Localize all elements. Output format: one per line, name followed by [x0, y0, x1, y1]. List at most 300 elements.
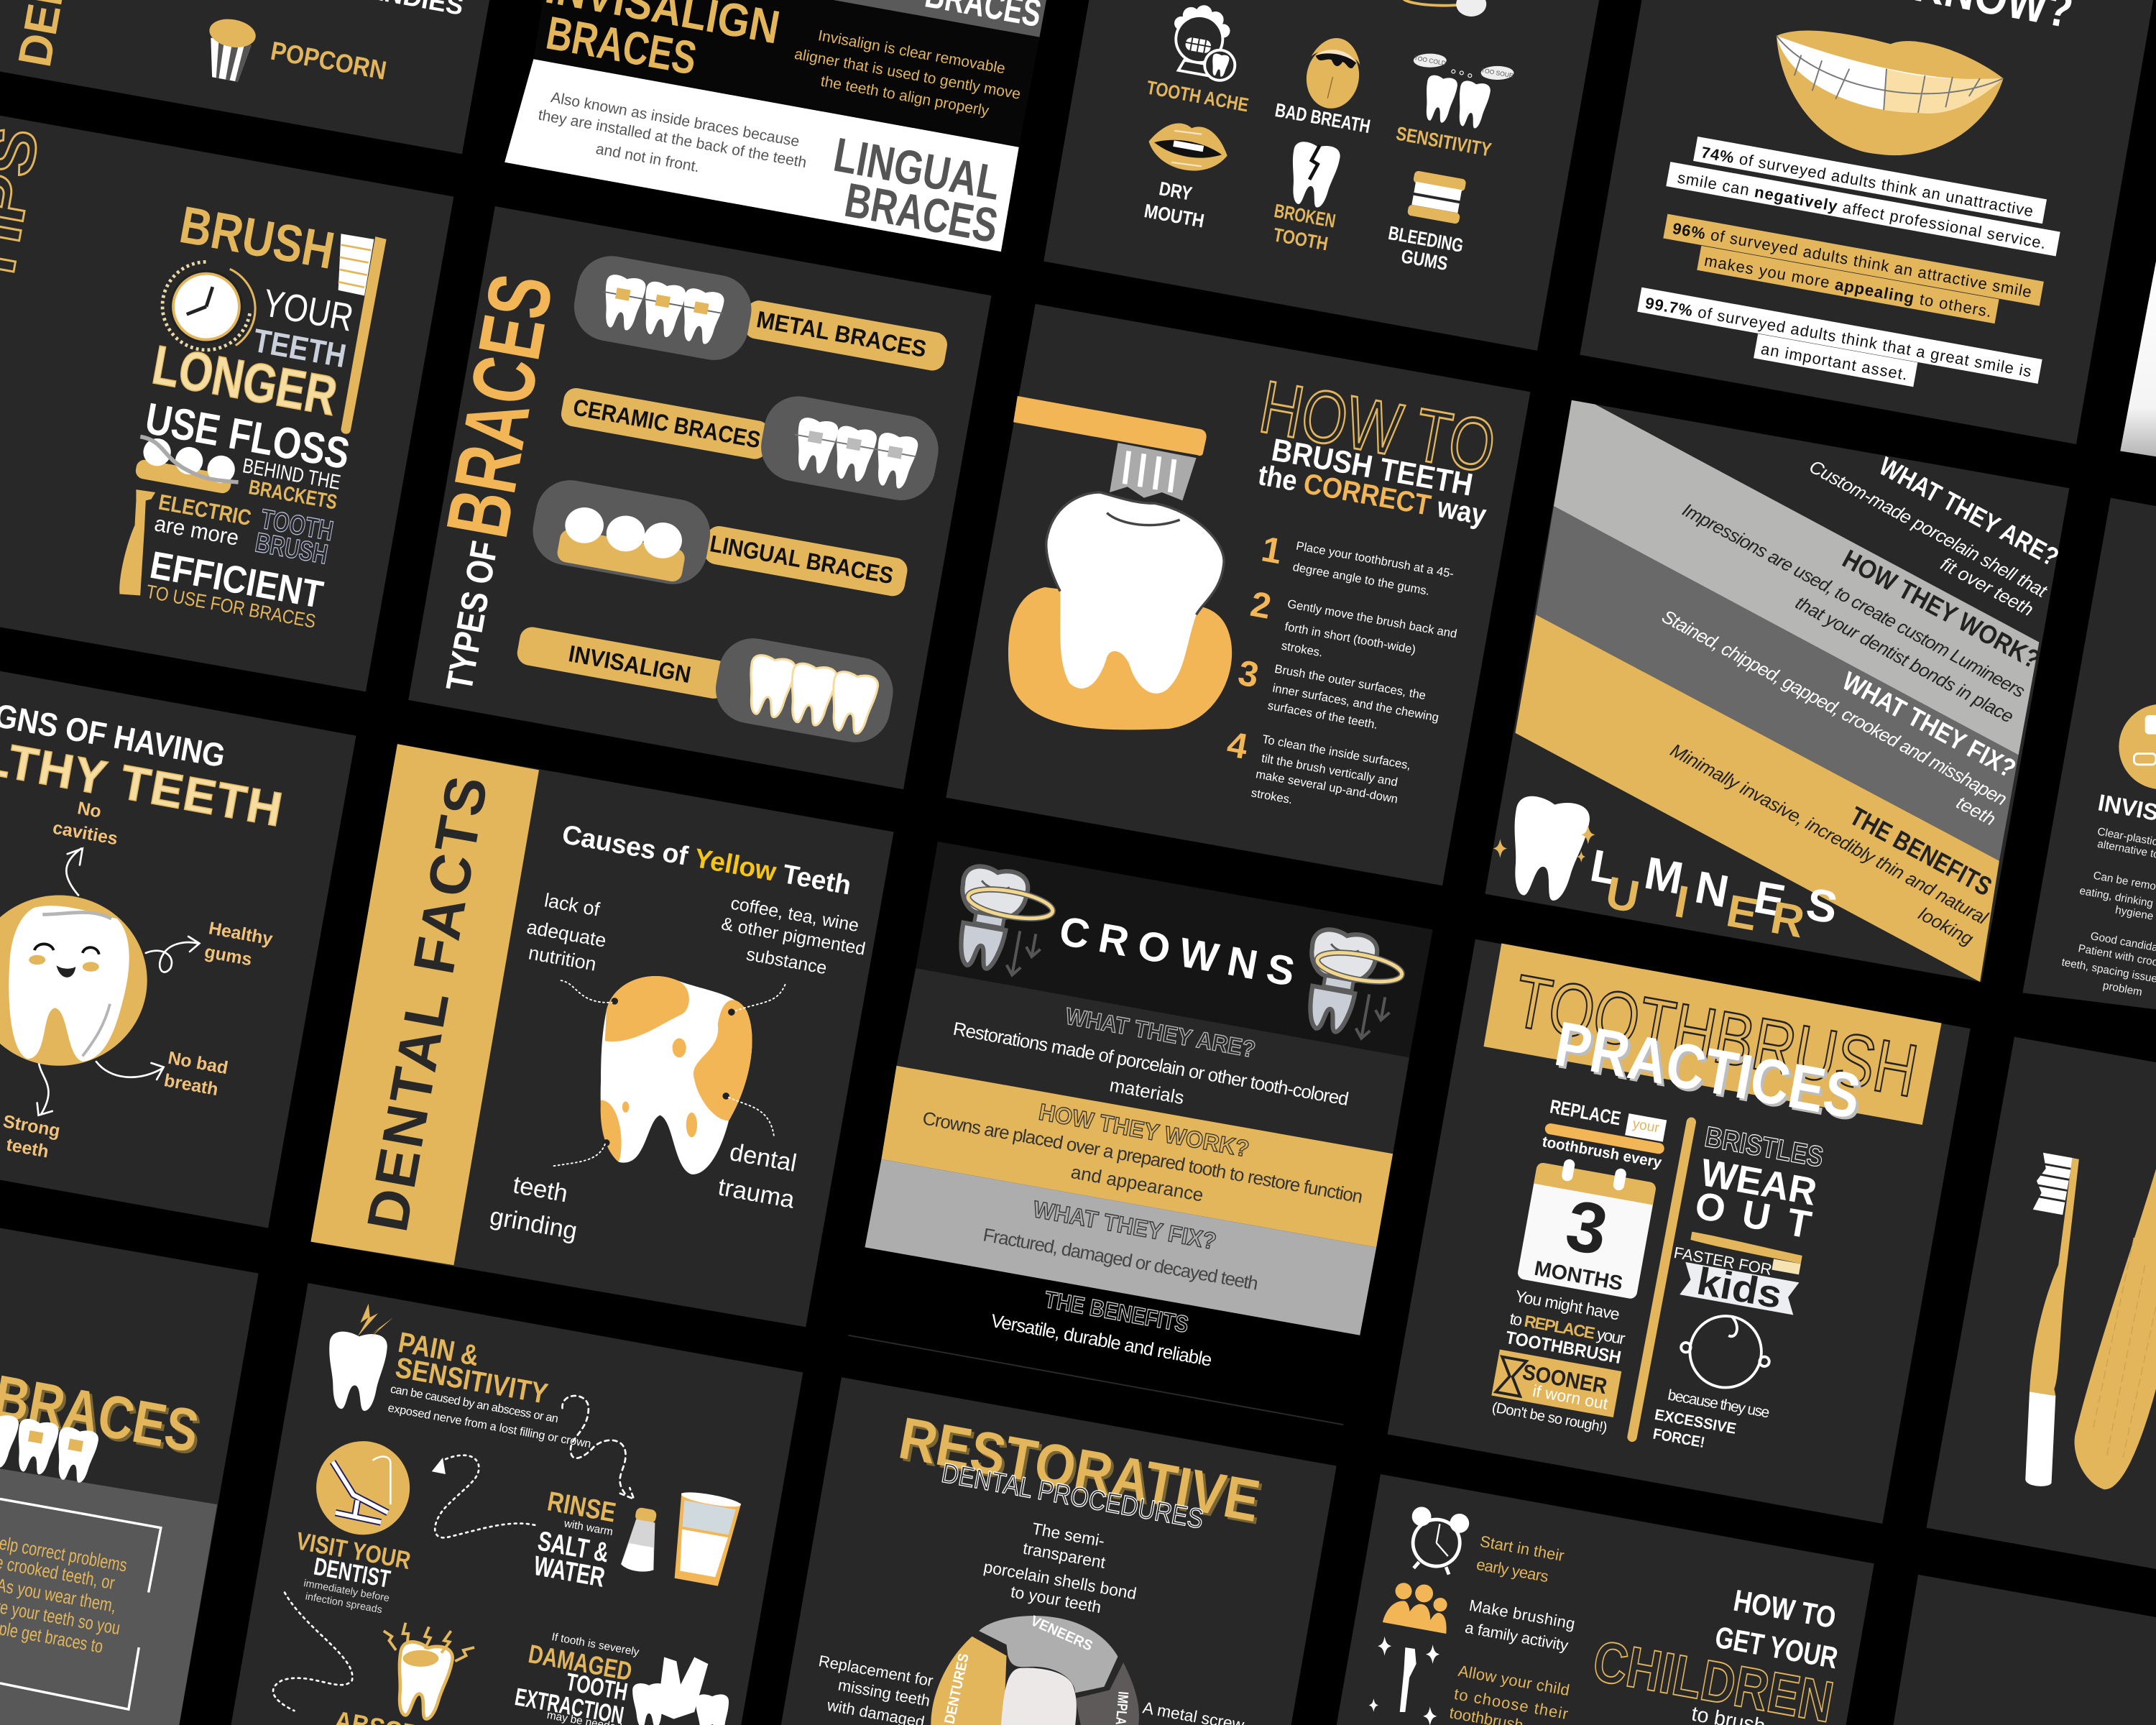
label: broken tooth: TOOTH — [1272, 224, 1330, 254]
step 1 — [1258, 528, 1455, 598]
band: header — [916, 842, 1433, 1057]
band: gray — [865, 1159, 1376, 1335]
section: how they work: and appearance — [1069, 1162, 1205, 1206]
panel: invisalign and lingual braces — [505, 0, 1046, 253]
heading: lumineers: R — [1767, 892, 1808, 947]
icon: clock — [155, 256, 262, 358]
row: lingual braces — [528, 474, 909, 598]
text: what they fix: WHAT THEY FIX? — [1838, 666, 2021, 783]
band: dark gray — [1536, 506, 2019, 861]
icon: large handle — [2075, 1169, 2156, 1489]
heading: causes of yellow teeth: Causes of Yellow Teeth — [560, 819, 854, 901]
icon: right crown — [1298, 926, 1407, 1044]
heading: dental procedures: DENTAL PROCEDURES — [939, 1458, 1206, 1535]
heading: pain and sensitivity — [393, 1326, 550, 1410]
label: strong teeth: Strong — [1, 1111, 62, 1141]
stat: 96 percent: 96% of surveyed adults think an attractive smile — [1671, 218, 2033, 301]
text: replacement note: You might have — [1514, 1287, 1621, 1324]
text: rinse: with warm — [563, 1517, 614, 1538]
label: dental trauma — [716, 1138, 798, 1214]
icon: forceps — [632, 1657, 729, 1725]
text: start early: Start in their — [1478, 1532, 1566, 1565]
text: what they are: WHAT THEY ARE? — [1874, 451, 2063, 572]
stat: 96 percent: makes you more appealing to others. — [1703, 252, 1993, 321]
text: lingual description: Also known as inside braces because — [550, 89, 801, 150]
text: veneers description: transparent — [1021, 1539, 1107, 1572]
label: strong teeth: teeth — [5, 1135, 50, 1162]
gray band — [833, 0, 1046, 37]
callout: sooner — [1491, 1349, 1621, 1417]
label: lack of nutrition — [525, 889, 608, 975]
step 3: 3 — [1235, 652, 1262, 696]
step 4 — [1224, 724, 1412, 806]
icon: toothbrush and sparkles — [1369, 1637, 1439, 1725]
gray band — [0, 1468, 217, 1725]
icon: electric toothbrush — [119, 489, 155, 595]
text: invisalign description: aligner that is used to gently move — [793, 46, 1022, 103]
text: because they use — [1651, 1386, 1771, 1451]
panel: crowns — [848, 842, 1433, 1425]
icon: flossed teeth — [133, 436, 244, 496]
panel: restorative — [781, 1377, 1337, 1725]
band: gold — [1515, 615, 1999, 982]
frame — [0, 1499, 161, 1709]
icon: brush with your — [1544, 1113, 1667, 1155]
stat: 99.7 percent: 99.7% of surveyed adults think that a great smile is — [1644, 293, 2033, 380]
step 4: make several up-and-down — [1255, 767, 1399, 806]
panel: dental facts — [310, 744, 894, 1327]
label: teeth grinding: grinding — [488, 1202, 579, 1245]
heading: pain and sensitivity: PAIN & — [396, 1326, 482, 1372]
step 3: inner surfaces, and the chewing — [1271, 681, 1440, 724]
row: ceramic braces — [559, 386, 944, 506]
text: are more: are more — [152, 511, 241, 551]
heading: crowns: CROWNS — [1056, 908, 1298, 995]
text: veneers description: The semi- — [1031, 1519, 1106, 1550]
text: what they are: fit over teeth — [1938, 554, 2037, 620]
heading: lumineers: L — [1587, 840, 1623, 895]
section: what they are: Restorations made of porcelain or other tooth-colored — [952, 1019, 1350, 1110]
step 1: 1 — [1258, 528, 1285, 571]
divider — [1632, 1122, 1691, 1437]
section: what they fix: WHAT THEY FIX? — [1031, 1196, 1218, 1254]
text: faster for: FASTER FOR — [1672, 1243, 1774, 1279]
stat: 74 percent: 74% of surveyed adults think an unattractive — [1700, 143, 2035, 220]
text: braces description — [0, 1532, 129, 1657]
arrow: dotted to dentist — [435, 1455, 535, 1537]
heading: lumineers: I — [1671, 876, 1692, 928]
text: rinse: WATER — [531, 1550, 607, 1593]
panel: symptoms — [1044, 0, 1599, 351]
row: invisalign: INVISALIGN — [566, 640, 693, 688]
icon: brush with your: your — [1631, 1116, 1661, 1136]
chart: procedure wheel: DENTURES — [942, 1652, 972, 1725]
panel: bottom right blank — [1894, 1575, 2156, 1725]
text: immediately: immediately before — [303, 1578, 390, 1604]
text: invisalign description: Invisalign is clear removable — [816, 27, 1007, 77]
panel: did you know — [1580, 0, 2153, 444]
icon: tongue — [1302, 34, 1365, 113]
text: rinse — [531, 1486, 618, 1593]
stat: 74 percent — [1666, 137, 2060, 257]
label: popcorn: POPCORN — [269, 36, 389, 86]
step 4: 4 — [1224, 724, 1251, 767]
heading: lumineers: M — [1641, 848, 1687, 904]
label: healthy gums — [203, 918, 275, 970]
text: 3: 3 — [1560, 1185, 1613, 1271]
icon: popcorn — [201, 16, 258, 83]
text: what they fix: teeth — [1953, 793, 1999, 830]
label: dry mouth: DRY — [1158, 178, 1194, 205]
text: the benefits: looking — [1915, 904, 1976, 950]
section: how they work: Crowns are placed over a prepared tooth to restore function — [921, 1108, 1364, 1208]
step 2: strokes. — [1281, 639, 1324, 660]
divider line — [848, 1335, 1343, 1425]
band: dark — [896, 968, 1409, 1154]
step 1: degree angle to the gums. — [1291, 560, 1431, 598]
step 2: 2 — [1248, 584, 1274, 627]
label: coffee tea wine: coffee, tea, wine — [729, 893, 860, 936]
icon: gold tooth circle — [2119, 704, 2156, 789]
text: to use for braces: TO USE FOR BRACES — [144, 581, 318, 632]
text: because they use: EXCESSIVE — [1654, 1407, 1738, 1438]
text: description: hygiene — [2114, 904, 2155, 923]
label: lack of nutrition: adequate — [525, 916, 608, 952]
text: electric: ELECTRIC — [157, 490, 253, 530]
text: the benefits: Minimally invasive, incredibly thin and natural — [1667, 740, 1991, 929]
illustration: tooth — [1046, 492, 1224, 694]
label: no bad breath: No bad — [167, 1048, 229, 1078]
label: bleeding gums: GUMS — [1399, 245, 1450, 275]
text: efficient: EFFICIENT — [147, 544, 326, 617]
icon: alarm clock — [1403, 1505, 1470, 1576]
text: damaged tooth extraction — [512, 1631, 640, 1725]
text: start early: early years — [1475, 1555, 1550, 1586]
icon: toothbrush tip — [2025, 1392, 2055, 1486]
step 4: To clean the inside surfaces, — [1261, 732, 1412, 772]
white band — [505, 59, 1019, 252]
text: dentures description: Replacement for — [817, 1652, 934, 1690]
banner: kids — [1680, 1260, 1799, 1317]
text: damaged tooth extraction: DAMAGED — [526, 1639, 635, 1686]
panel: braces bottom left — [0, 1228, 259, 1725]
text: brush outline: BRUSH — [253, 527, 330, 571]
heading: how to: HOW TO — [1254, 364, 1501, 488]
text: rinse: SALT & — [535, 1525, 612, 1568]
label: bleeding gums — [1387, 222, 1465, 275]
text: behind the: BEHIND THE — [241, 454, 342, 494]
icon: crowned tooth partial — [1403, 0, 1486, 17]
text: family activity: a family activity — [1464, 1619, 1570, 1655]
label: coffee tea wine: & other pigmented — [720, 914, 867, 960]
heading: lumineers — [1587, 840, 1841, 947]
section: the benefits: Versatile, durable and reliable — [990, 1311, 1213, 1371]
heading: lingual braces — [830, 128, 1005, 253]
text: wear: WEAR — [1697, 1151, 1820, 1214]
heading: toothbrush: TOOTHBRUSH — [1508, 958, 1924, 1113]
section: the benefits: THE BENEFITS — [1043, 1287, 1191, 1338]
icon: left crown — [949, 863, 1058, 980]
text: dentures description: missing teeth — [837, 1675, 931, 1710]
heading: how to: HOW TO — [1731, 1583, 1838, 1634]
banner: kids: kids — [1694, 1260, 1785, 1317]
icon: glass of water — [666, 1489, 742, 1588]
arrow: dotted to abscess — [273, 1593, 352, 1711]
text: months: MONTHS — [1532, 1257, 1624, 1295]
text: don't be so rough: (Don't be so rough!) — [1491, 1399, 1608, 1436]
panel: toothbrush practices — [1387, 939, 1971, 1524]
heading: restorative: RESTORATIVE — [897, 1408, 1267, 1537]
section: what they are: WHAT THEY ARE? — [1064, 1003, 1258, 1062]
chart: procedure wheel: VENEERS — [1028, 1613, 1095, 1655]
text: description: problem — [2102, 980, 2143, 998]
label: tooth ache: TOOTH ACHE — [1145, 76, 1250, 116]
label: no bad breath — [162, 1048, 229, 1100]
label: healthy gums: Healthy — [207, 918, 275, 949]
callout: sooner: if worn out — [1531, 1381, 1610, 1413]
heading: visit your: VISIT YOUR — [294, 1527, 413, 1575]
text: replacement note: TOOTHBRUSH — [1504, 1328, 1623, 1368]
icon: small toothbrush — [1688, 1232, 1803, 1274]
text: how they work: that your dentist bonds in place — [1792, 593, 2017, 727]
arrow head — [432, 1458, 446, 1474]
icon: bleeding gums — [1407, 170, 1467, 224]
section: what they fix: Fractured, damaged or decayed teeth — [982, 1225, 1260, 1294]
text: dentures description — [817, 1652, 934, 1725]
text: immediately: infection spreads — [305, 1591, 383, 1616]
heading: lingual braces: LINGUAL — [830, 128, 1005, 211]
heading: practices: PRACTICES — [1552, 1011, 1869, 1135]
label: bleeding gums: BLEEDING — [1387, 222, 1465, 257]
icon: tooth ache — [1166, 1, 1245, 83]
label: teeth grinding: teeth — [511, 1171, 570, 1208]
section: what they are: materials — [1108, 1075, 1186, 1108]
panel: healthy teeth — [0, 671, 356, 1228]
icon: sensitive teeth — [1414, 54, 1514, 130]
icon: bristles — [2032, 1152, 2073, 1215]
text: damaged tooth extraction: If tooth is severely — [550, 1631, 640, 1659]
icon: toothbrush — [338, 234, 387, 434]
text: what they fix: Stained, chipped, gapped, crooked and misshapen — [1659, 607, 2010, 810]
row: ceramic braces: CERAMIC BRACES — [571, 394, 763, 453]
row: metal braces: METAL BRACES — [755, 306, 929, 362]
text: teeth: TEETH — [250, 321, 349, 374]
icon: sensitive teeth: TOO SOUR — [1480, 66, 1514, 79]
text: allow your child: to choose their — [1452, 1685, 1570, 1723]
label: lack of nutrition: lack of — [543, 889, 602, 921]
text: cause: exposed nerve from a lost filling or crown — [387, 1402, 592, 1450]
text: replacement note — [1504, 1287, 1627, 1368]
label: healthy gums: gums — [203, 942, 254, 970]
label: broken tooth: BROKEN — [1273, 200, 1337, 232]
text: because they use: because they use — [1667, 1386, 1771, 1421]
panel: children — [1337, 1474, 1874, 1725]
text: description — [2060, 826, 2156, 998]
label: no bad breath: breath — [162, 1070, 220, 1100]
arrow: down — [37, 1062, 52, 1116]
panel: how to brush — [946, 304, 1530, 886]
stat: 74 percent: smile can negatively affect professional service. — [1676, 168, 2047, 252]
panel: white edge card — [2120, 262, 2156, 456]
text: how they work: HOW THEY WORK? — [1838, 544, 2045, 675]
text: family activity: Make brushing — [1468, 1596, 1577, 1633]
label: coffee tea wine — [720, 893, 867, 978]
arrow: lower right — [96, 1062, 164, 1080]
panel: types of braces — [408, 206, 991, 789]
label: bad breath: BAD BREATH — [1273, 99, 1372, 137]
arrow: up — [66, 848, 83, 896]
row: metal braces — [568, 251, 949, 372]
panel: pain and sensitivity — [231, 1283, 803, 1725]
label: dental trauma: dental — [727, 1138, 798, 1177]
row: lingual braces: LINGUAL BRACES — [708, 530, 895, 589]
heading: dental facts: DENTAL FACTS — [355, 771, 500, 1236]
text: longer: LONGER — [148, 334, 341, 428]
heading: get your: GET YOUR — [1713, 1620, 1841, 1675]
text: cause: can be caused by an abscess or an — [390, 1383, 559, 1425]
step 3: Brush the outer surfaces, the — [1273, 662, 1427, 702]
text: damaged tooth extraction: TOOTH — [564, 1668, 630, 1706]
text: replace: REPLACE — [1548, 1095, 1623, 1129]
step 4: tilt the brush vertically and — [1261, 751, 1399, 789]
icon: smile — [1777, 31, 2004, 155]
icon: tooth with pain bolts — [324, 1304, 393, 1412]
step 2 — [1248, 584, 1458, 660]
text: bristles: BRISTLES — [1703, 1121, 1826, 1174]
text: lingual description: they are installed at the back of the teeth — [537, 106, 808, 171]
arrow: right — [146, 937, 199, 972]
banner — [1483, 943, 1942, 1125]
text: family activity — [1464, 1596, 1577, 1655]
icon: baby face — [1675, 1309, 1776, 1395]
panel: invisalign right — [2022, 498, 2156, 1009]
icon: calendar — [1516, 1154, 1658, 1300]
label: broken tooth — [1272, 200, 1337, 254]
text: start early — [1475, 1532, 1566, 1586]
chart: procedure wheel — [931, 1613, 1139, 1725]
leader lines — [553, 980, 785, 1166]
text: dentist: DENTIST — [312, 1553, 392, 1593]
text: tooth: TOOTH — [259, 504, 336, 547]
icon: teeth with brackets — [0, 1410, 100, 1485]
text: the benefits: THE BENEFITS — [1845, 801, 1996, 901]
band: light gray — [1554, 400, 2039, 755]
text: veneers description — [982, 1519, 1138, 1616]
label: dental trauma: trauma — [716, 1173, 797, 1214]
text: invisalign description — [793, 27, 1022, 119]
text: out: OUT — [1692, 1184, 1815, 1247]
callout: sooner: SOONER — [1521, 1360, 1609, 1399]
panel: brush tips — [0, 116, 453, 691]
label: strong teeth — [1, 1111, 62, 1162]
icon: salt shaker — [620, 1506, 664, 1574]
panel: lumineers — [1485, 400, 2069, 982]
illustration: bristles — [1110, 443, 1197, 500]
text: immediately — [303, 1578, 390, 1616]
step 3: surfaces of the teeth. — [1266, 699, 1379, 732]
label: dry mouth — [1143, 178, 1206, 232]
text: allow your child: Allow your child — [1457, 1662, 1571, 1699]
text: because they use: FORCE! — [1651, 1426, 1706, 1451]
illustration: gum — [1008, 587, 1232, 730]
text: brush: BRUSH — [175, 196, 338, 280]
step 4: strokes. — [1250, 786, 1294, 806]
panel: toothbrushes right — [1926, 1037, 2156, 1569]
text: lingual description: and not in front. — [594, 141, 701, 175]
heading: lingual braces: BRACES — [841, 173, 1002, 253]
text: replacement note: to REPLACE your — [1508, 1309, 1627, 1348]
heading: braces vertical: BRACES — [428, 267, 571, 544]
heading: lumineers: E — [1750, 872, 1789, 926]
heading: braces: BRACES — [543, 6, 701, 85]
step 1: Place your toothbrush at a 45- — [1295, 539, 1455, 581]
label: dry mouth: MOUTH — [1143, 200, 1206, 232]
icon: broken tooth — [1284, 140, 1342, 210]
icon: dental chair — [316, 1441, 410, 1535]
text: use floss: USE FLOSS — [142, 394, 354, 478]
arrow: dashed to rinse — [562, 1396, 634, 1499]
section: how they work: HOW THEY WORK? — [1037, 1099, 1251, 1162]
text: rinse: RINSE — [545, 1486, 618, 1529]
text: your: YOUR — [259, 282, 356, 340]
label: coffee tea wine: substance — [745, 944, 829, 978]
label: teeth grinding — [488, 1171, 579, 1245]
step 3 — [1235, 652, 1440, 732]
text: what they are: Custom-made porcelain shell that — [1806, 456, 2051, 602]
heading: lumineers: N — [1691, 862, 1733, 917]
label: no cavities: cavities — [51, 818, 119, 849]
icon: sensitive teeth: TOO COLD — [1414, 54, 1447, 67]
row: invisalign — [515, 625, 898, 748]
text: description: teeth, spacing issue — [2060, 956, 2156, 985]
icon: dry lips — [1145, 119, 1231, 177]
text: invisalign description: the teeth to align properly — [819, 73, 990, 119]
icon: abscess tooth — [384, 1623, 474, 1721]
heading: lumineers: E — [1723, 886, 1761, 941]
side stripe — [310, 744, 539, 1265]
step 2: Gently move the brush back and — [1286, 597, 1458, 641]
icon: shiny tooth — [1493, 794, 1595, 904]
heading: pain and sensitivity: SENSITIVITY — [393, 1351, 550, 1410]
text: how they work: Impressions are used, to create custom Lumineers — [1679, 500, 2028, 702]
heading: the correct way: the CORRECT way — [1256, 459, 1489, 531]
heading: brush teeth: BRUSH TEETH — [1269, 432, 1475, 503]
text: allow your child — [1448, 1662, 1571, 1725]
illustration: stained tooth — [601, 976, 752, 1174]
heading: restorative: RESTORATIVE — [894, 1406, 1264, 1535]
text: veneers description: porcelain shells bond — [982, 1557, 1138, 1603]
illustration: brush handle — [1013, 396, 1207, 456]
label: no cavities: No — [76, 798, 103, 822]
panel: popcorn snacks — [0, 0, 489, 154]
icon: family — [1383, 1578, 1454, 1634]
text: veneers description: to your teeth — [1009, 1582, 1102, 1616]
text: toothbrush every: toothbrush every — [1541, 1133, 1663, 1172]
heading: practices: PRACTICES — [1550, 1008, 1866, 1132]
heading: types of: TYPES OF — [438, 538, 505, 694]
text: brackets: BRACKETS — [247, 476, 339, 515]
label: sensitivity: SENSITIVITY — [1394, 122, 1493, 161]
step 2: forth in short (tooth-wide) — [1284, 620, 1416, 656]
stat: 99.7 percent: an important asset. — [1759, 340, 1909, 384]
icon: slim toothbrush — [2030, 1158, 2079, 1396]
heading: lumineers: S — [1802, 879, 1841, 934]
label: lack of nutrition: nutrition — [527, 942, 598, 975]
heading: lumineers: U — [1602, 868, 1643, 923]
band: gold — [881, 1066, 1393, 1247]
label: no cavities — [51, 798, 119, 849]
illustration: happy tooth — [0, 896, 147, 1066]
